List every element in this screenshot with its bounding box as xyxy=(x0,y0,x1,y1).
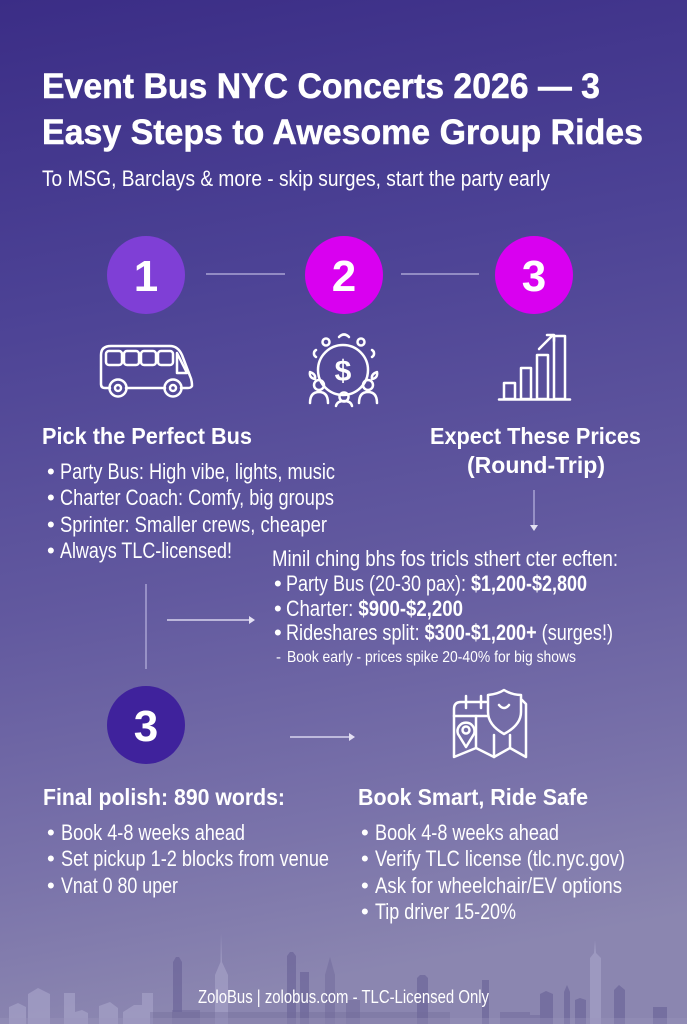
title: Easy Steps to Awesome Group Rides xyxy=(42,113,643,152)
bus options list: Always TLC-licensed! xyxy=(60,538,232,563)
step 1 badge xyxy=(107,236,185,314)
subtitle: To MSG, Barclays & more - skip surges, start the party early xyxy=(42,166,550,191)
booking tips list: Tip driver 15-20% xyxy=(375,899,516,924)
booking tips list: • xyxy=(361,899,369,924)
price list: Minil ching bhs fos tricls sthert cter ecften: xyxy=(272,546,618,571)
icon: bus xyxy=(101,346,192,396)
final polish list: • xyxy=(47,846,55,871)
booking tips list: Ask for wheelchair/EV options xyxy=(375,873,622,898)
final polish list xyxy=(47,820,329,898)
arrow down xyxy=(530,490,538,531)
icon: group money circle xyxy=(310,334,377,406)
booking tips list: Verify TLC license (tlc.nyc.gov) xyxy=(375,846,625,871)
panel: expected prices heading xyxy=(430,423,641,478)
price list: • xyxy=(274,571,282,596)
price list: • xyxy=(274,620,282,645)
price list xyxy=(272,546,618,666)
heading: pick the perfect bus: Pick the Perfect Bus xyxy=(42,423,252,449)
vertical connector xyxy=(145,584,147,669)
price list: Rideshares split: $300-$1,200+ (surges!) xyxy=(286,620,613,645)
connector line xyxy=(401,273,479,275)
step 2 badge xyxy=(305,236,383,314)
heading: book smart ride safe: Book Smart, Ride Safe xyxy=(358,784,588,810)
icon: calendar map shield xyxy=(454,690,526,757)
price list: • xyxy=(274,596,282,621)
step 3 badge xyxy=(495,236,573,314)
icon: rising price bars xyxy=(499,335,570,400)
heading: final polish: Final polish: 890 words: xyxy=(43,784,285,810)
final polish list: Vnat 0 80 uper xyxy=(61,873,178,898)
price list: - xyxy=(276,649,281,666)
icon: group money circle: $ xyxy=(335,355,352,388)
arrow right to prices xyxy=(167,616,255,624)
booking tips list: • xyxy=(361,820,369,845)
booking tips list: Book 4-8 weeks ahead xyxy=(375,820,559,845)
skyline xyxy=(0,933,687,1024)
final polish list: • xyxy=(47,820,55,845)
panel: expected prices heading: (Round-Trip) xyxy=(467,452,605,478)
step 3 dark badge xyxy=(107,686,185,764)
final polish list: Book 4-8 weeks ahead xyxy=(61,820,245,845)
bus options list: • xyxy=(47,538,55,563)
bus options list: • xyxy=(47,485,55,510)
price list: Charter: $900-$2,200 xyxy=(286,596,463,621)
bus options list: Charter Coach: Comfy, big groups xyxy=(60,485,334,510)
bus options list xyxy=(47,459,335,563)
price list: Book early - prices spike 20-40% for big shows xyxy=(287,649,576,666)
panel: expected prices heading: Expect These Prices xyxy=(430,423,641,449)
booking tips list xyxy=(361,820,625,924)
booking tips list: • xyxy=(361,873,369,898)
step 1 badge: 1 xyxy=(134,252,158,301)
panel: pick the perfect bus xyxy=(42,423,335,563)
bus options list: Party Bus: High vibe, lights, music xyxy=(60,459,335,484)
step 3 dark badge: 3 xyxy=(134,702,158,751)
bus options list: • xyxy=(47,512,55,537)
step 3 badge: 3 xyxy=(522,252,546,301)
price list: Party Bus (20-30 pax): $1,200-$2,800 xyxy=(286,571,587,596)
bus options list: Sprinter: Smaller crews, cheaper xyxy=(60,512,327,537)
arrow right to booking xyxy=(290,733,355,741)
panel: final polish xyxy=(43,784,329,898)
bus options list: • xyxy=(47,459,55,484)
step 2 badge: 2 xyxy=(332,252,356,301)
title xyxy=(42,67,643,152)
panel: book smart ride safe xyxy=(358,784,625,924)
final polish list: Set pickup 1-2 blocks from venue xyxy=(61,846,329,871)
connector line xyxy=(206,273,285,275)
booking tips list: • xyxy=(361,846,369,871)
title: Event Bus NYC Concerts 2026 — 3 xyxy=(42,67,600,106)
final polish list: • xyxy=(47,873,55,898)
footer: ZoloBus | zolobus.com - TLC-Licensed Only xyxy=(198,987,489,1007)
